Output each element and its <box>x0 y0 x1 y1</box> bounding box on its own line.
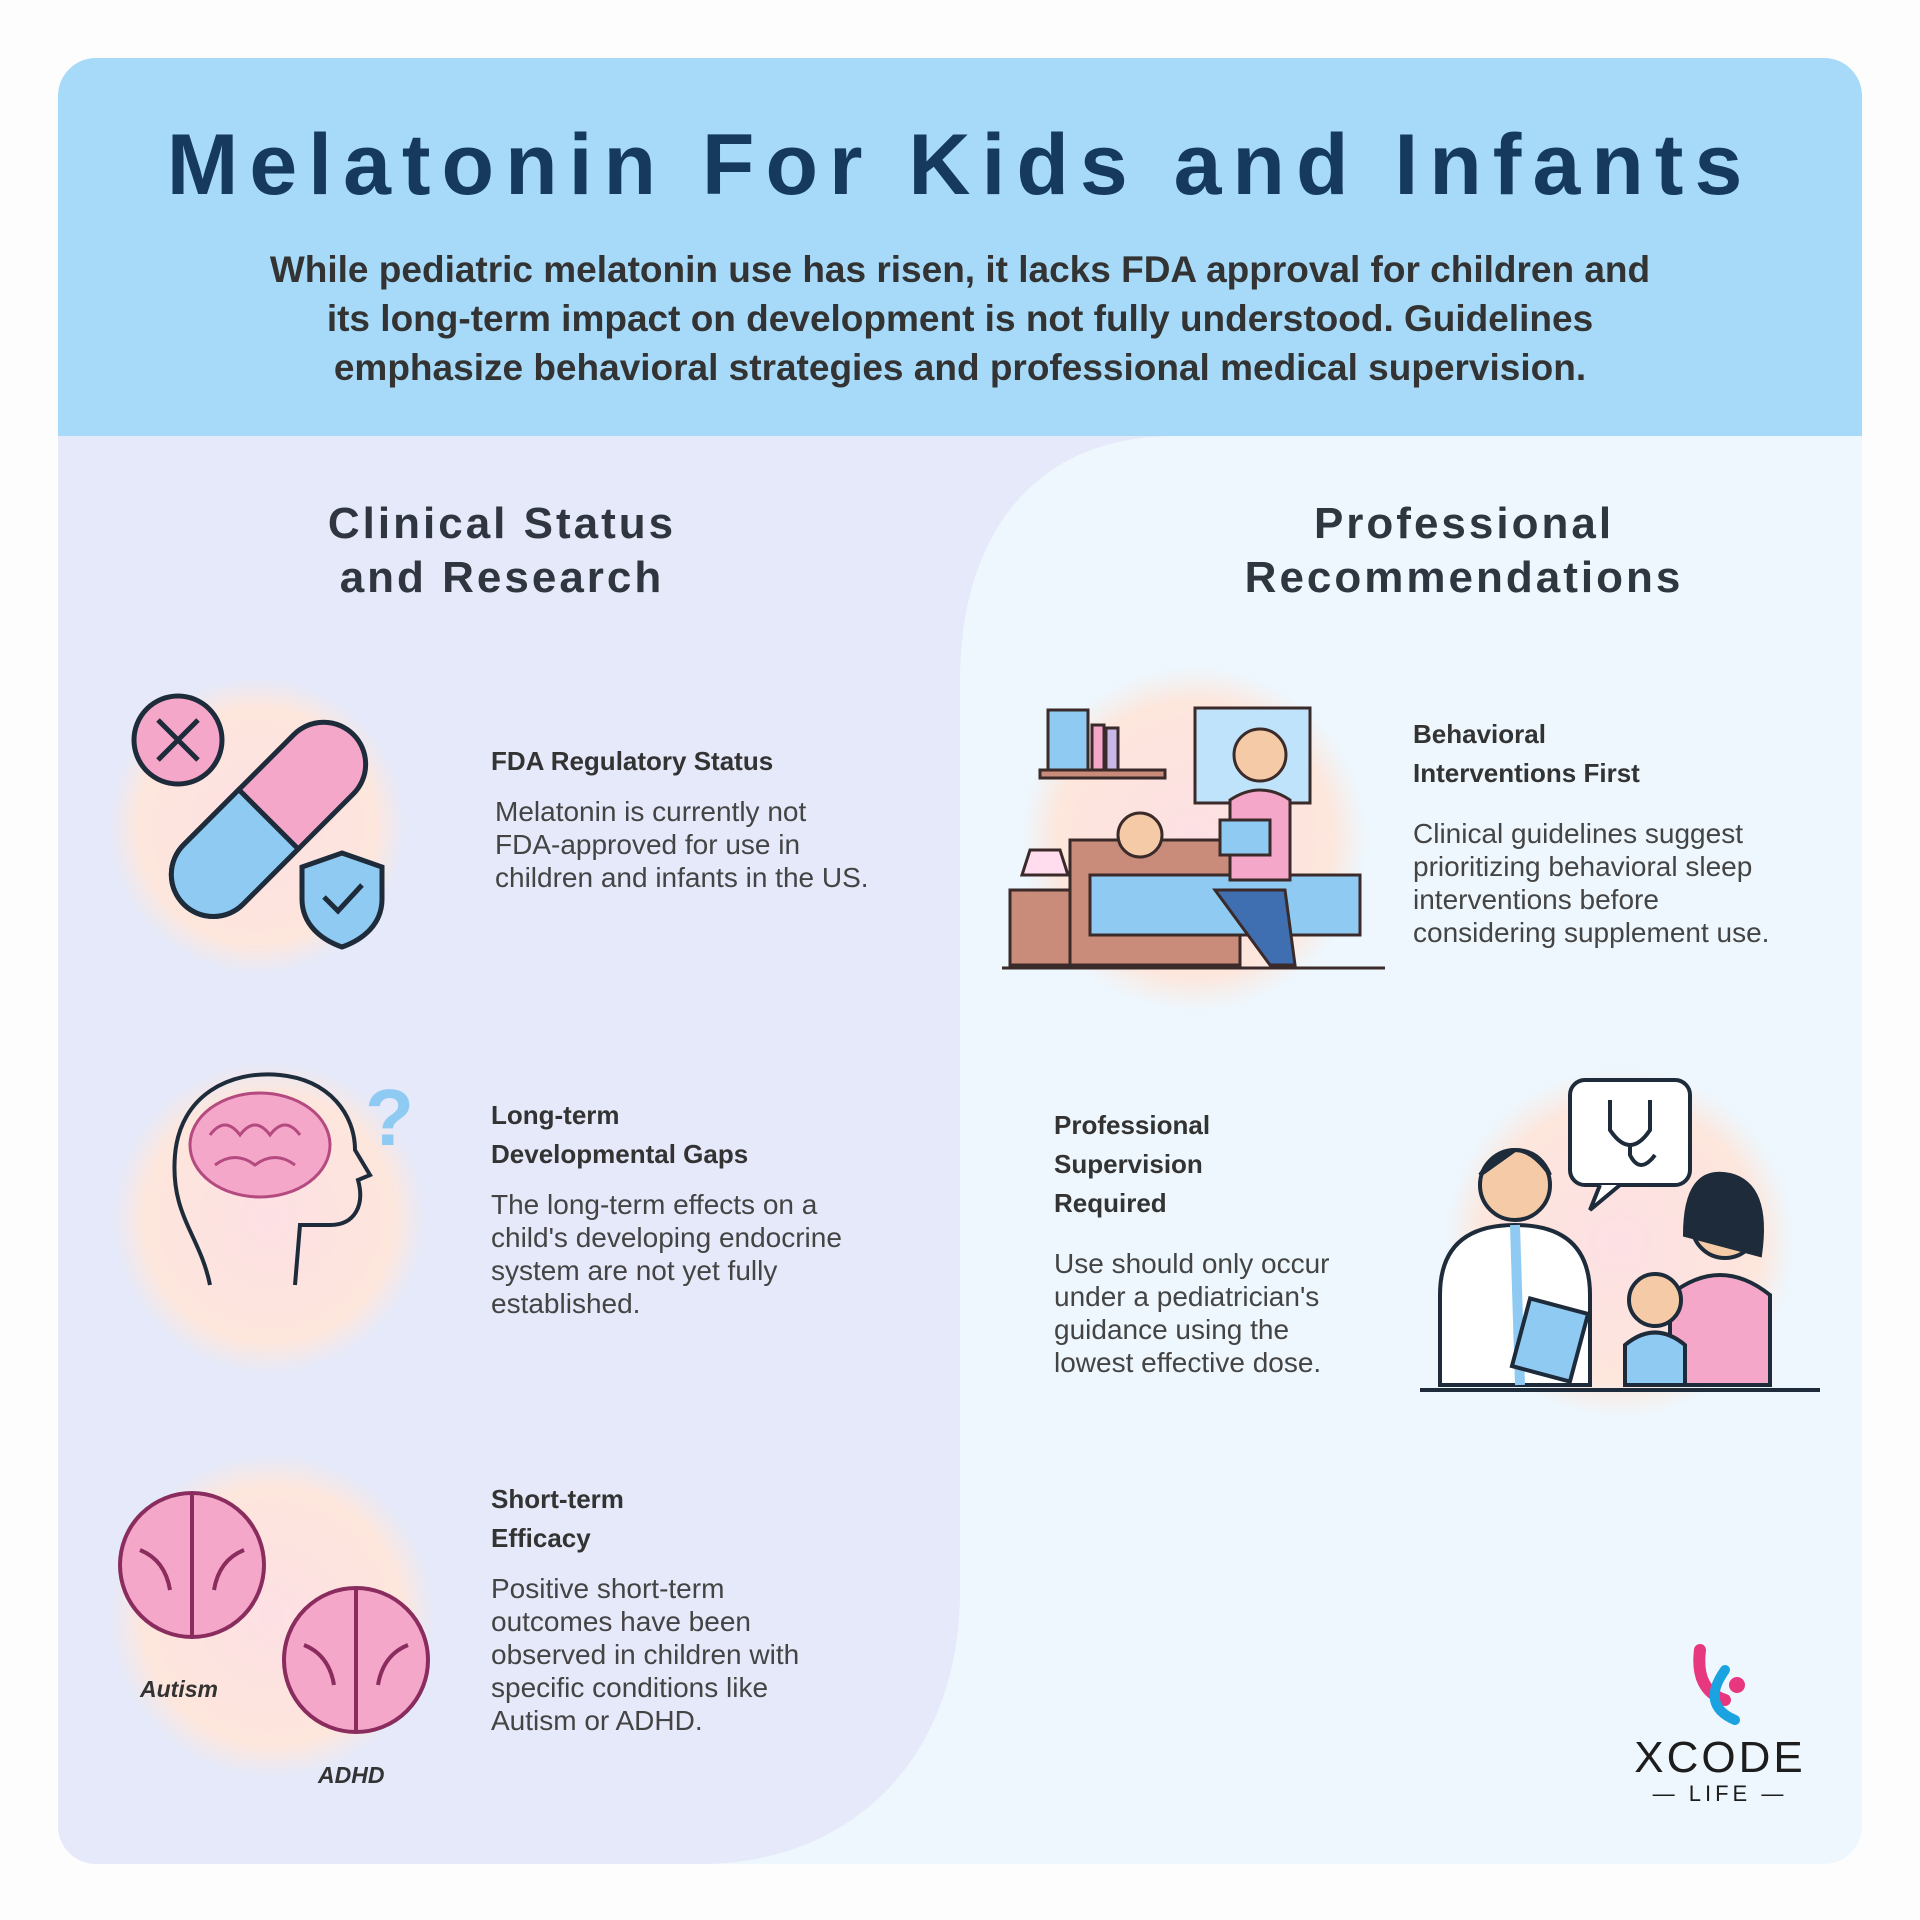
text: FDA regulatory status: Melatonin is currently not <box>495 796 806 827</box>
illustration: doctor with mother and child <box>1420 1078 1820 1392</box>
text: short-term efficacy: Positive short-term <box>491 1573 724 1604</box>
text: short-term efficacy: Efficacy <box>491 1523 591 1553</box>
title: Melatonin For Kids and Infants <box>167 117 1753 213</box>
text: long-term developmental gaps: established. <box>491 1288 640 1319</box>
text: FDA regulatory status: FDA-approved for use in <box>495 829 800 860</box>
text: FDA regulatory status <box>491 746 869 893</box>
text: short-term efficacy <box>491 1484 799 1736</box>
subtitle: emphasize behavioral strategies and professional medical supervision. <box>334 347 1586 388</box>
text: behavioral interventions first: Clinical guidelines suggest <box>1413 818 1743 849</box>
icon: pill with x and shield <box>132 694 384 950</box>
text: professional supervision required <box>1054 1110 1329 1378</box>
text: short-term efficacy: outcomes have been <box>491 1606 751 1637</box>
heading: professional recommendations: Recommendations <box>1245 553 1683 602</box>
heading: clinical status: Clinical Status <box>328 499 676 548</box>
text: short-term efficacy: Short-term <box>491 1484 624 1514</box>
text: long-term developmental gaps: The long-term effects on a <box>491 1189 817 1220</box>
text: short-term efficacy: specific conditions like <box>491 1672 768 1703</box>
logo: Xcode Life: — LIFE — <box>1653 1781 1787 1806</box>
text: FDA regulatory status: FDA Regulatory Status <box>491 746 773 776</box>
text: long-term developmental gaps: system are not yet fully <box>491 1255 777 1286</box>
logo: Xcode Life <box>1634 1644 1806 1806</box>
subtitle: While pediatric melatonin use has risen, it lacks FDA approval for children and <box>270 249 1650 290</box>
icon: two brains: Autism <box>139 1676 218 1702</box>
text: professional supervision required: guidance using the <box>1054 1314 1289 1345</box>
text: long-term developmental gaps: Long-term <box>491 1100 620 1130</box>
text: professional supervision required: Required <box>1054 1188 1167 1218</box>
icon: head with brain <box>172 1072 414 1286</box>
text: professional supervision required: under a pediatrician's <box>1054 1281 1319 1312</box>
icon: two brains: ADHD <box>317 1762 384 1788</box>
text: professional supervision required: Supervision <box>1054 1149 1203 1179</box>
icon: two brains <box>118 1491 430 1788</box>
text: professional supervision required: lowest effective dose. <box>1054 1347 1321 1378</box>
text: long-term developmental gaps: child's developing endocrine <box>491 1222 842 1253</box>
text: behavioral interventions first <box>1413 719 1769 948</box>
subtitle <box>270 249 1650 388</box>
text: behavioral interventions first: Behavioral <box>1413 719 1546 749</box>
text: short-term efficacy: observed in children with <box>491 1639 799 1670</box>
text: behavioral interventions first: interventions before <box>1413 884 1659 915</box>
icon: head with brain: ? <box>365 1073 414 1162</box>
text: professional supervision required: Professional <box>1054 1110 1210 1140</box>
text: FDA regulatory status: children and infants in the US. <box>495 862 869 893</box>
heading: clinical status <box>328 499 676 602</box>
text: behavioral interventions first: prioritizing behavioral sleep <box>1413 851 1752 882</box>
heading: professional recommendations <box>1245 499 1683 602</box>
logo: Xcode Life: XCODE <box>1634 1733 1806 1782</box>
heading: professional recommendations: Professional <box>1314 499 1614 548</box>
text: long-term developmental gaps <box>491 1100 842 1319</box>
subtitle: its long-term impact on development is not fully understood. Guidelines <box>327 298 1593 339</box>
text: professional supervision required: Use should only occur <box>1054 1248 1329 1279</box>
text: behavioral interventions first: considering supplement use. <box>1413 917 1769 948</box>
text: behavioral interventions first: Interventions First <box>1413 758 1640 788</box>
text: long-term developmental gaps: Developmental Gaps <box>491 1139 748 1169</box>
illustration: bedtime reading <box>1002 706 1385 970</box>
text: short-term efficacy: Autism or ADHD. <box>491 1705 703 1736</box>
heading: clinical status: and Research <box>340 553 664 602</box>
